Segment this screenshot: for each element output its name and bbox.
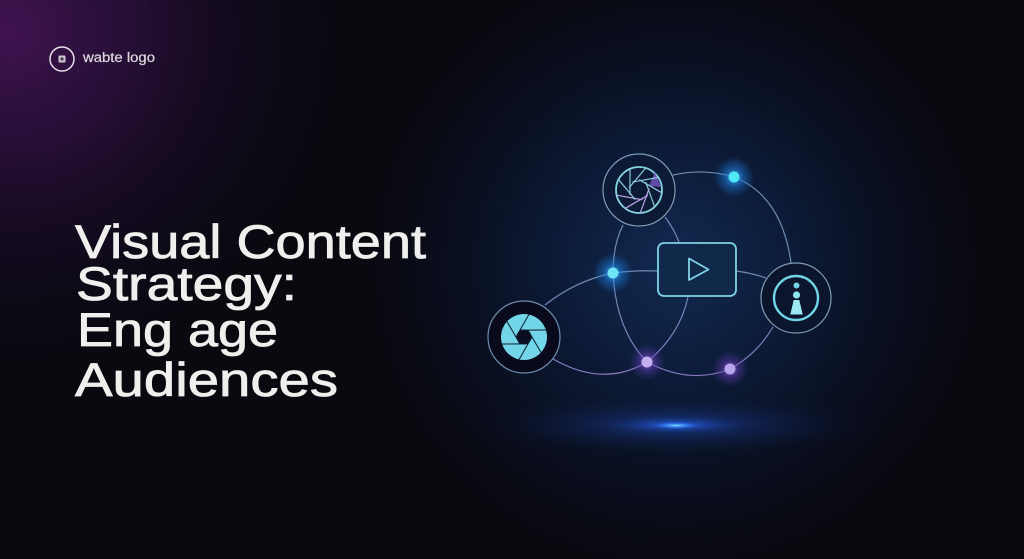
icon: left aperture filled (488, 301, 560, 373)
title: Visual Content (75, 215, 426, 268)
logo text: wabte logo (82, 50, 155, 65)
icon: video play panel (658, 243, 736, 296)
connection lines (545, 172, 791, 376)
icon: logo badge (50, 47, 74, 71)
node: glowing dots (593, 157, 754, 387)
title: Audiences (75, 353, 338, 406)
icon: top aperture outline (603, 154, 675, 226)
title: Strategy: (76, 257, 297, 310)
network diagram (488, 154, 831, 387)
floor light glow (466, 393, 886, 457)
title (75, 215, 426, 406)
logo (50, 47, 155, 71)
icon: person in circle (761, 263, 831, 333)
title: Eng age (77, 303, 278, 356)
